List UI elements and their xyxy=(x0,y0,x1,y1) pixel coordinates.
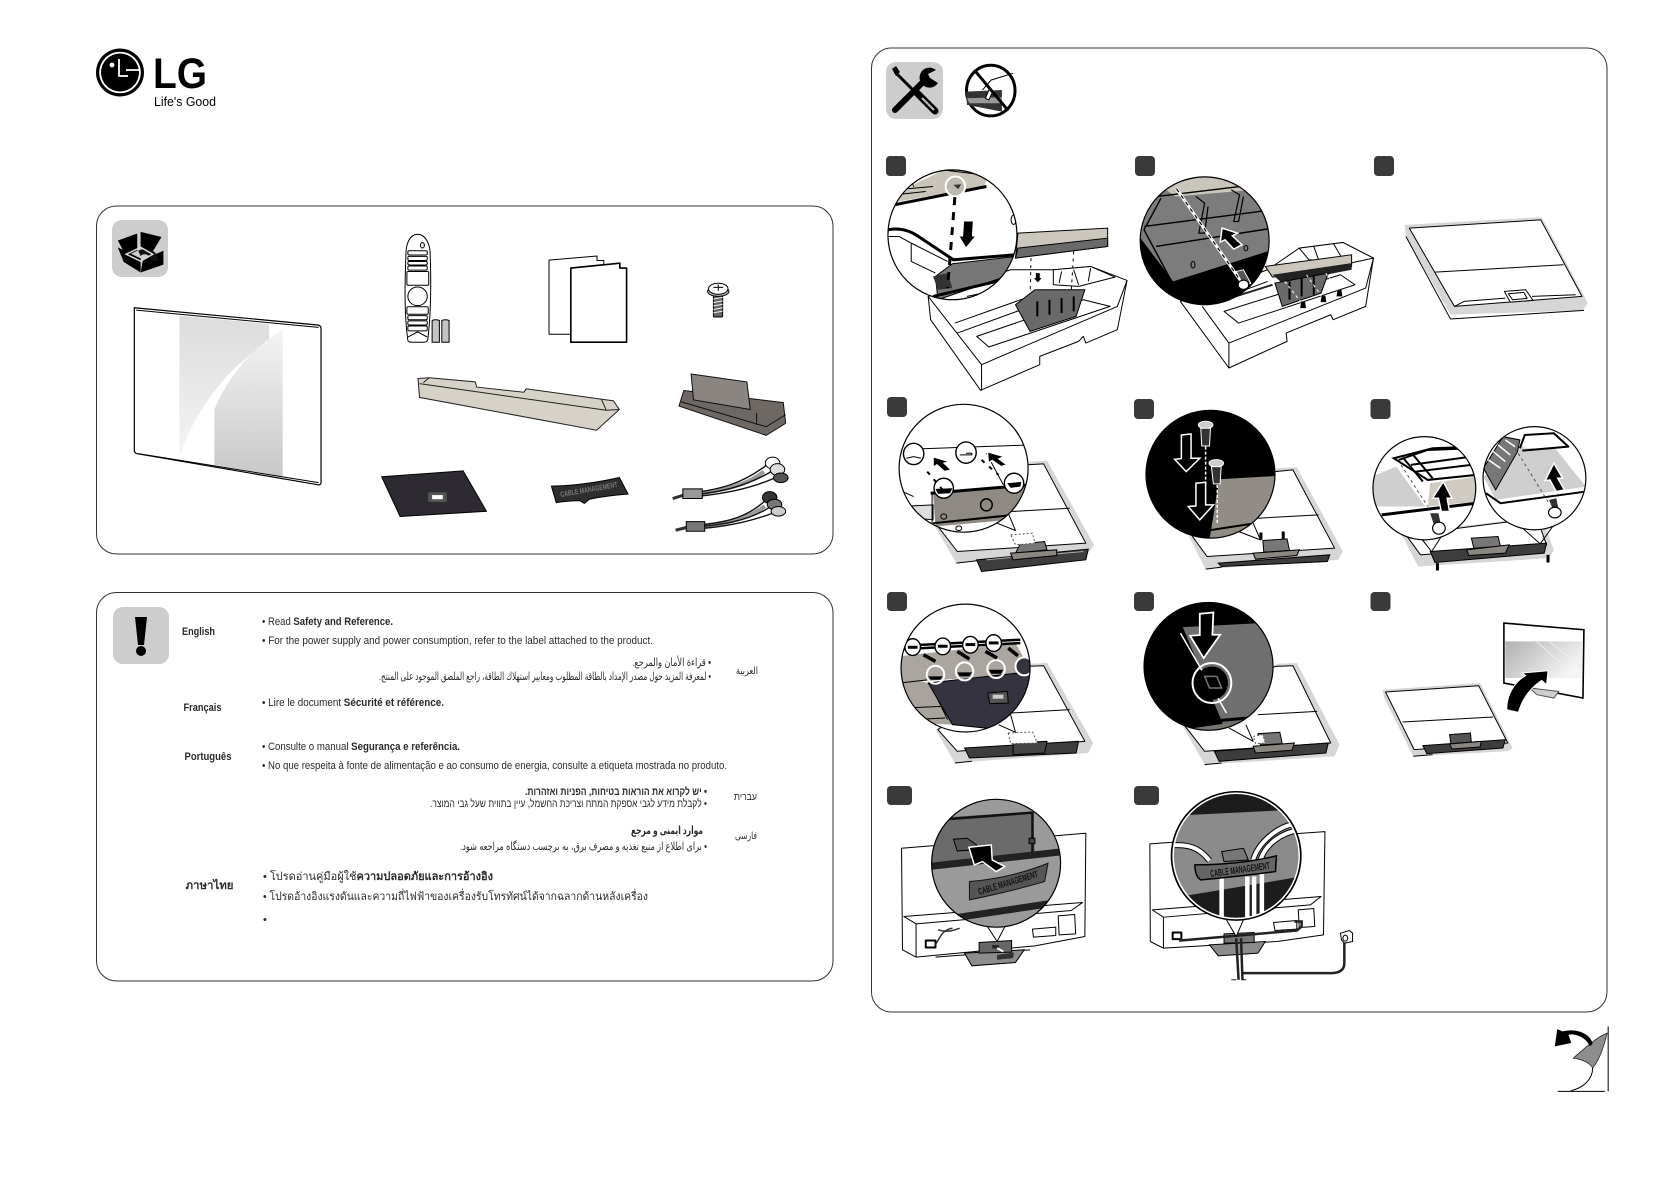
magnified detail right xyxy=(1483,427,1586,530)
magnified detail left xyxy=(1372,437,1476,540)
step 10 xyxy=(887,786,1086,966)
step badge 5 xyxy=(1134,399,1154,419)
TV back with stand xyxy=(933,461,1094,571)
cable cover xyxy=(551,477,628,503)
magnified detail xyxy=(888,168,1017,300)
TV back with stand xyxy=(1401,517,1554,570)
foam box with stand xyxy=(928,228,1127,390)
language: Thai xyxy=(186,869,648,926)
language: Persian: موارد ایمنی و مرجع xyxy=(631,825,703,837)
magnified detail xyxy=(928,799,1064,927)
step 5 xyxy=(1134,399,1343,569)
panel: safety notes xyxy=(96,592,833,981)
TV rear with routed cables xyxy=(1150,832,1353,980)
language: Persian xyxy=(460,825,757,853)
icon: open box xyxy=(112,220,168,277)
TV lying down with stand xyxy=(1383,683,1513,756)
magnified detail xyxy=(1144,602,1277,733)
stand bar xyxy=(418,378,619,430)
language: Portuguese: • No que respeita à fonte de alimentação e ao consumo de energia, consulte a etiqueta mostrada no produto. xyxy=(262,760,727,772)
TV lying face down xyxy=(1404,217,1588,319)
booklets xyxy=(549,256,627,342)
magnified detail xyxy=(1171,790,1302,923)
TV back with stand xyxy=(1183,663,1339,765)
TV standing upright xyxy=(1504,623,1584,698)
arrow: lift up xyxy=(1507,671,1548,712)
language: Arabic xyxy=(379,655,758,684)
step badge 8 xyxy=(1134,592,1154,611)
language: Hebrew: • יש לקרוא את הוראות בטיחות, הפניות ואזהרות. xyxy=(525,785,707,798)
step badge 11 xyxy=(1134,786,1159,805)
language: Hebrew: עברית xyxy=(734,792,757,803)
magnified detail xyxy=(899,604,1033,733)
TV front view xyxy=(134,308,321,485)
step badge 1 xyxy=(886,156,906,176)
language: French xyxy=(184,697,444,714)
screw xyxy=(708,283,729,317)
TV back with stand xyxy=(935,663,1093,763)
step 11 xyxy=(1134,786,1353,980)
icon: exclamation xyxy=(113,607,169,664)
language: Hebrew xyxy=(430,785,757,810)
cable cover: CABLE MANAGEMENT xyxy=(560,480,619,499)
panel: package contents xyxy=(96,206,833,554)
step 9 xyxy=(1370,592,1584,756)
TV back with stand xyxy=(1189,467,1343,569)
language: Thai: • โปรดอ่านคู่มือผู้ใช้ความปลอดภัยและการอ้างอิง xyxy=(263,869,493,883)
language: Portuguese: Português xyxy=(184,751,232,763)
TV rear xyxy=(902,833,1086,966)
language: Arabic: • لمعرفة المزيد حول مصدر الإمداد بالطاقة المطلوب ومعايير استهلاك الطاقة، راجع الملصق الموجود على المنتج. xyxy=(379,671,711,684)
foam box with stand xyxy=(1180,242,1373,368)
step badge 3 xyxy=(1374,156,1394,176)
language: English: • For the power supply and power consumption, refer to the label attached to the product. xyxy=(262,635,653,647)
icon: do not use cloth xyxy=(966,65,1015,116)
language: English: • Read Safety and Reference. xyxy=(262,616,393,628)
remote control and batteries xyxy=(405,234,449,342)
language: Hebrew: • לקבלת מידע לגבי אספקת המתח וצריכת החשמל, עיין בתווית שעל גבי המוצר. xyxy=(430,797,707,810)
step 8 xyxy=(1134,592,1339,765)
step badge 9 xyxy=(1370,592,1390,611)
cable management label: CABLE MANAGEMENT xyxy=(1210,861,1271,880)
language: English xyxy=(182,616,653,647)
LG logo: LG xyxy=(153,50,207,98)
step badge 6 xyxy=(1370,399,1390,419)
language: Persian: • برای اطلاع از منبع تغذیه و مصرف برق، به برچسب دستگاه مراجعه شود. xyxy=(460,840,707,853)
language: French: • Lire le document Sécurité et référence. xyxy=(262,697,444,709)
icon: turn page xyxy=(1555,1026,1608,1091)
language: Thai: ภาษาไทย xyxy=(186,878,234,892)
magnified detail xyxy=(1146,410,1277,540)
step 2 xyxy=(1135,156,1373,368)
step badge 10 xyxy=(887,786,912,805)
step 3 xyxy=(1374,156,1588,319)
language: Portuguese: • Consulte o manual Segurança e referência. xyxy=(262,741,460,753)
step 1 xyxy=(886,156,1127,390)
language: Portuguese xyxy=(184,741,727,772)
step 7 xyxy=(887,592,1093,763)
language: French: Français xyxy=(184,702,222,714)
language: Arabic: العربية xyxy=(736,666,758,677)
LG logo: Life's Good xyxy=(154,94,216,109)
LG logo xyxy=(96,48,216,109)
language: Thai: • โปรดอ้างอิงแรงดันและความถี่ไฟฟ้าของเครื่องรับโทรทัศน์ได้จากฉลากด้านหลังเครื่อง xyxy=(263,888,648,903)
stand body xyxy=(679,374,786,435)
back cover xyxy=(382,471,486,516)
icon: tools xyxy=(886,62,943,119)
step 4 xyxy=(887,397,1094,571)
magnified detail xyxy=(899,404,1030,532)
language: Persian: فارسی xyxy=(735,831,757,842)
language: Arabic: • قراءة الأمان والمرجع. xyxy=(632,655,711,669)
step badge 2 xyxy=(1135,156,1155,176)
cable management label: CABLE MANAGEMENT xyxy=(977,869,1040,898)
panel: assembly steps xyxy=(872,48,1607,1012)
step 6 xyxy=(1370,399,1586,570)
language: English: English xyxy=(182,626,215,638)
AV cables xyxy=(673,457,788,531)
step badge 7 xyxy=(887,592,907,611)
magnified detail xyxy=(1137,175,1273,310)
step badge 4 xyxy=(887,397,907,417)
language: Thai: • xyxy=(263,914,267,926)
